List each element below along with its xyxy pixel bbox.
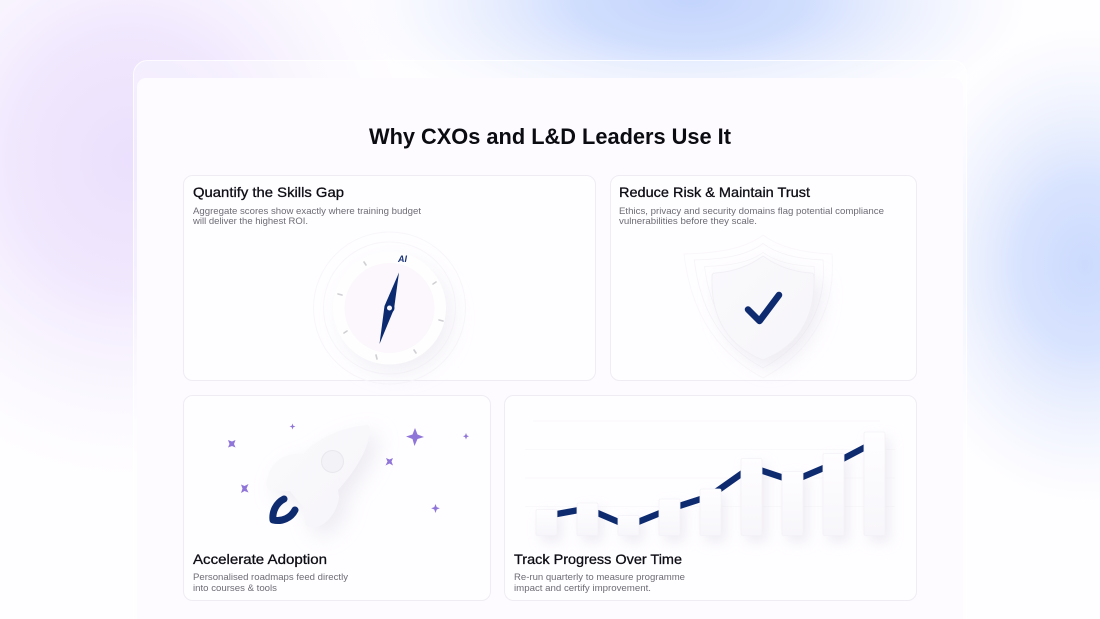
inner panel — [137, 78, 963, 619]
panel: quantify the skills gap — [184, 176, 596, 384]
panel: reduce risk and maintain trust — [610, 176, 916, 380]
text: reduce risk description: vulnerabilities before they scale. — [619, 216, 757, 226]
text: quantify description: Aggregate scores show exactly where training budget — [193, 206, 421, 216]
check mark — [748, 295, 779, 321]
icon: sparkles — [228, 424, 469, 513]
icon: shield — [684, 235, 832, 378]
text: track description: impact and certify improvement. — [514, 583, 651, 593]
text: track description: Re-run quarterly to measure programme — [514, 572, 685, 582]
title: Why CXOs and L&D Leaders Use It — [369, 124, 732, 149]
heading: reduce risk: Reduce Risk & Maintain Trust — [619, 184, 810, 200]
text: accelerate description: into courses & tools — [193, 583, 277, 593]
heading: accelerate adoption: Accelerate Adoption — [193, 551, 327, 567]
line chart with bars — [525, 421, 895, 542]
label: AI: AI — [397, 254, 407, 264]
needle — [380, 272, 399, 344]
flame — [273, 499, 295, 521]
trend line — [546, 442, 875, 526]
bar shadows — [541, 438, 890, 542]
outer glass panel — [134, 60, 967, 619]
panel: track progress over time — [504, 396, 916, 600]
heading: quantify: Quantify the Skills Gap — [193, 184, 344, 200]
text: quantify description: will deliver the highest ROI. — [192, 216, 308, 226]
text: accelerate description: Personalised roadmaps feed directly — [193, 572, 348, 582]
text: reduce risk description: Ethics, privacy and security domains flag potential compliance — [619, 206, 884, 216]
heading: track progress: Track Progress Over Time — [514, 551, 682, 567]
panel: accelerate adoption — [184, 396, 490, 600]
icon: compass — [314, 232, 466, 384]
icon: rocket — [266, 425, 378, 535]
bars — [536, 432, 885, 536]
